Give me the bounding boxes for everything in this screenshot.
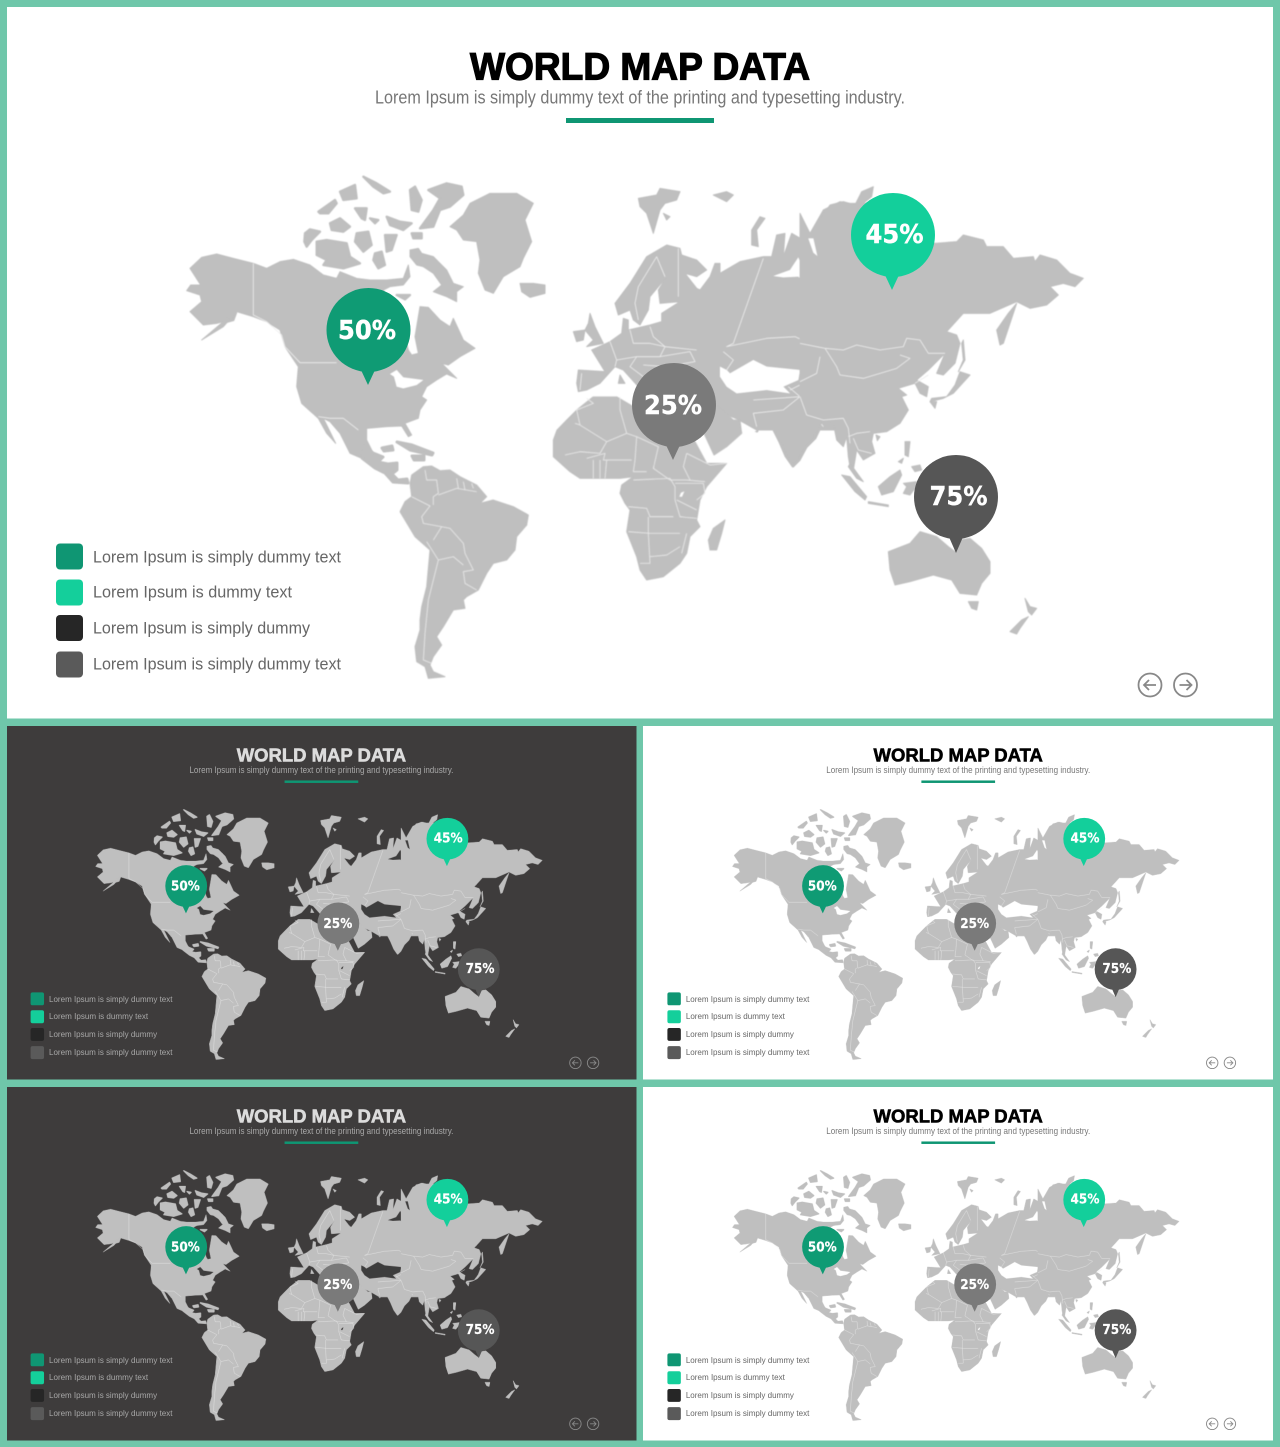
pin: 45%: 45%	[434, 832, 463, 847]
panel background	[7, 1087, 636, 1440]
legend: Lorem Ipsum is simply dummy text	[49, 1408, 173, 1418]
world map	[96, 1171, 542, 1421]
pin: 50%: 50%	[171, 1241, 200, 1256]
navigation arrows	[570, 1057, 599, 1069]
title underline	[921, 1141, 995, 1144]
legend: Lorem Ipsum is simply dummy text	[49, 1355, 173, 1365]
legend: Lorem Ipsum is simply dummy text	[686, 1047, 810, 1057]
legend: Lorem Ipsum is simply dummy text	[49, 994, 173, 1004]
pin: 50%: 50%	[338, 316, 396, 346]
navigation arrows	[570, 1418, 599, 1430]
navigation arrows	[1206, 1057, 1236, 1069]
pin: 25%: 25%	[323, 1278, 352, 1293]
legend: Lorem Ipsum is simply dummy text	[93, 548, 341, 566]
legend: Lorem Ipsum is simply dummy	[686, 1390, 795, 1400]
navigation arrows	[1206, 1418, 1236, 1430]
panel: main white slide	[7, 7, 1273, 718]
legend: Lorem Ipsum is simply dummy text	[93, 654, 341, 674]
legend: Lorem Ipsum is dummy text	[686, 1372, 786, 1382]
subtitle: Lorem Ipsum is simply dummy text of the printing and typesetting industry.	[189, 1126, 453, 1136]
pin: 50%	[326, 288, 410, 385]
legend	[667, 1353, 810, 1420]
title underline	[285, 780, 358, 783]
slide content	[667, 1106, 1236, 1430]
pin: 75%: 75%	[1102, 1323, 1131, 1338]
pin: 75%: 75%	[1102, 962, 1131, 977]
pin: 75%	[458, 948, 500, 997]
legend: Lorem Ipsum is simply dummy	[49, 1390, 158, 1400]
panel: dark slide top left	[7, 726, 636, 1080]
legend: Lorem Ipsum is dummy text	[49, 1011, 149, 1021]
pin: 75%	[458, 1309, 500, 1358]
title: WORLD MAP DATA	[470, 46, 810, 88]
legend: Lorem Ipsum is simply dummy text	[686, 994, 810, 1004]
world map	[96, 810, 542, 1060]
pin: 45%	[851, 193, 935, 290]
pin: 75%: 75%	[466, 962, 495, 977]
pin: 25%: 25%	[644, 391, 702, 421]
pin: 50%: 50%	[808, 880, 837, 895]
title: WORLD MAP DATA	[874, 745, 1043, 766]
pin: 50%	[165, 865, 207, 913]
legend: Lorem Ipsum is simply dummy	[49, 1029, 158, 1039]
pin: 75%	[914, 455, 998, 553]
legend: Lorem Ipsum is dummy text	[686, 1011, 786, 1021]
title underline	[285, 1141, 358, 1144]
title underline	[566, 118, 714, 123]
legend: Lorem Ipsum is simply dummy	[93, 618, 310, 638]
panel background	[643, 1087, 1273, 1440]
panel: dark slide bottom left	[7, 1087, 636, 1440]
subtitle: Lorem Ipsum is simply dummy text of the printing and typesetting industry.	[826, 1126, 1090, 1136]
legend: Lorem Ipsum is simply dummy text	[49, 1047, 173, 1057]
pin: 45%: 45%	[1071, 832, 1099, 847]
subtitle: Lorem Ipsum is simply dummy text of the printing and typesetting industry.	[375, 88, 905, 108]
pin: 50%: 50%	[808, 1241, 837, 1256]
pin: 25%: 25%	[960, 1278, 989, 1293]
slide content	[31, 1106, 599, 1430]
legend	[667, 992, 810, 1059]
pin: 45%: 45%	[1071, 1193, 1099, 1208]
pin: 45%	[1063, 1179, 1105, 1227]
legend	[31, 1353, 173, 1420]
title underline	[921, 780, 995, 783]
slide content	[667, 745, 1236, 1069]
legend: Lorem Ipsum is dummy text	[93, 582, 292, 602]
pin: 45%	[426, 1179, 468, 1227]
pin: 75%	[1095, 948, 1137, 997]
title: WORLD MAP DATA	[237, 745, 406, 766]
subtitle: Lorem Ipsum is simply dummy text of the printing and typesetting industry.	[189, 765, 453, 775]
pin: 75%: 75%	[466, 1323, 495, 1338]
pin: 50%: 50%	[171, 880, 200, 895]
legend: Lorem Ipsum is simply dummy	[686, 1029, 795, 1039]
panel: white slide top right	[643, 726, 1273, 1080]
pin: 50%	[802, 1226, 844, 1274]
world map	[732, 1171, 1179, 1421]
pin: 25%	[954, 902, 996, 951]
legend: Lorem Ipsum is dummy text	[49, 1372, 149, 1382]
pin: 75%	[1095, 1309, 1137, 1358]
subtitle: Lorem Ipsum is simply dummy text of the printing and typesetting industry.	[826, 765, 1090, 775]
legend	[31, 992, 173, 1059]
panel background	[7, 726, 636, 1080]
pin: 50%	[802, 865, 844, 913]
legend	[56, 544, 341, 678]
navigation arrows	[1138, 674, 1197, 696]
panel: white slide bottom right	[643, 1087, 1273, 1440]
world map	[187, 177, 1083, 678]
pin: 25%	[632, 363, 716, 460]
title: WORLD MAP DATA	[874, 1106, 1043, 1127]
legend: Lorem Ipsum is simply dummy text	[686, 1408, 810, 1418]
pin: 45%	[426, 818, 468, 866]
slide content	[31, 745, 599, 1069]
panel background	[7, 7, 1273, 718]
pin: 25%	[317, 902, 359, 951]
panel background	[643, 726, 1273, 1080]
pin: 45%: 45%	[866, 220, 924, 250]
pin: 25%: 25%	[960, 917, 989, 932]
pin: 45%: 45%	[434, 1193, 463, 1208]
pin: 45%	[1063, 818, 1105, 866]
pin: 50%	[165, 1226, 207, 1274]
title: WORLD MAP DATA	[237, 1106, 406, 1127]
pin: 25%	[317, 1263, 359, 1312]
pin: 75%: 75%	[930, 482, 988, 512]
world map	[732, 810, 1179, 1060]
pin: 25%: 25%	[323, 917, 352, 932]
legend: Lorem Ipsum is simply dummy text	[686, 1355, 810, 1365]
pin: 25%	[954, 1263, 996, 1312]
